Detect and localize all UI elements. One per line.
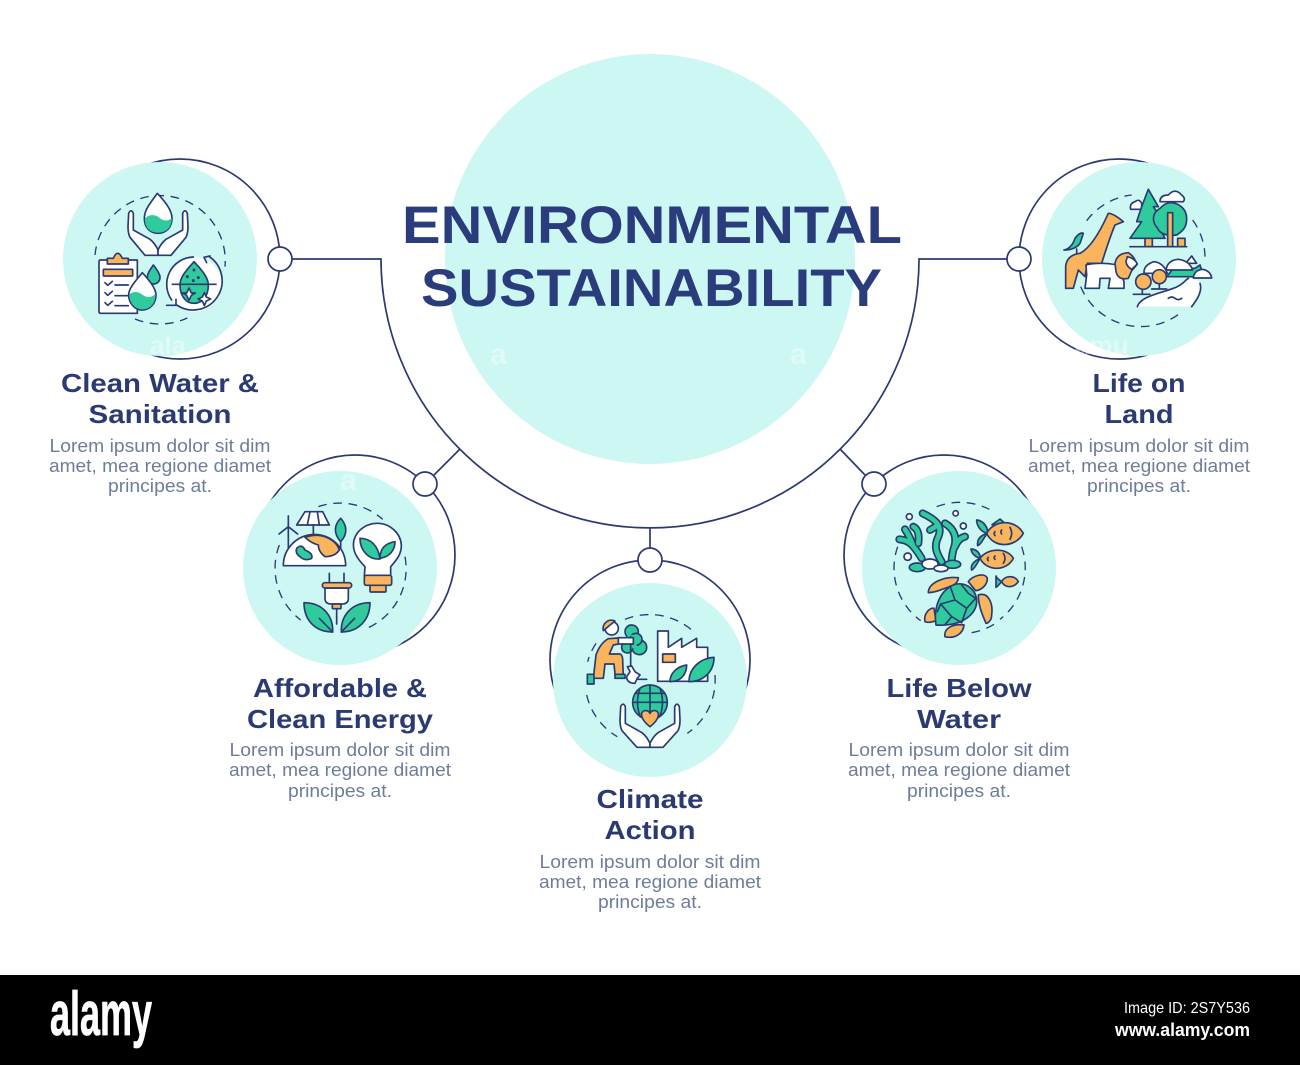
ring: energy bbox=[255, 455, 455, 655]
ring: climate bbox=[550, 560, 750, 760]
heading: water life bbox=[886, 673, 1032, 734]
watermark traces: a bbox=[612, 455, 624, 477]
mint disc: energy bbox=[243, 471, 437, 665]
text: energy description: principes at. bbox=[288, 781, 392, 801]
panel: clean water and sanitation bbox=[49, 159, 292, 496]
text: climate description: amet, mea regione diamet bbox=[539, 872, 761, 892]
logo: alamy: alamy bbox=[50, 980, 152, 1049]
text: water life description: principes at. bbox=[907, 781, 1011, 801]
text: energy description: amet, mea regione diamet bbox=[229, 760, 451, 780]
heading: clean water bbox=[61, 368, 259, 429]
title: SUSTAINABILITY bbox=[421, 259, 882, 318]
connector: big arc with branches bbox=[292, 259, 1007, 548]
text: climate description: Lorem ipsum dolor sit dim bbox=[540, 852, 760, 872]
watermark traces: a bbox=[340, 464, 357, 497]
text: energy description: Lorem ipsum dolor sit dim bbox=[230, 740, 450, 760]
panel: life below water bbox=[844, 455, 1070, 801]
text: land description: principes at. bbox=[1087, 476, 1191, 496]
central mint circle bbox=[445, 54, 855, 464]
text: clean water description: principes at. bbox=[108, 476, 212, 496]
panel: affordable and clean energy bbox=[229, 455, 455, 801]
heading: clean water: Clean Water & bbox=[61, 368, 259, 398]
ring: clean water bbox=[80, 159, 280, 359]
watermark traces bbox=[150, 330, 1128, 497]
text: climate description: principes at. bbox=[598, 892, 702, 912]
text: land description: amet, mea regione diamet bbox=[1028, 456, 1250, 476]
heading: clean water: Sanitation bbox=[88, 399, 232, 429]
heading: energy: Affordable & bbox=[253, 673, 427, 703]
website: www.alamy.com bbox=[1114, 1020, 1250, 1040]
text: clean water description: Lorem ipsum dolor sit dim bbox=[50, 436, 270, 456]
image id: Image ID: 2S7Y536 bbox=[1124, 1000, 1250, 1017]
heading: climate bbox=[596, 784, 704, 845]
icon: solar, bulb, plug and leaves bbox=[275, 503, 406, 632]
node: land bbox=[1007, 247, 1031, 271]
heading: energy bbox=[247, 673, 434, 734]
heading: water life: Life Below bbox=[886, 673, 1032, 703]
text: water life description: amet, mea regione diamet bbox=[848, 760, 1070, 780]
text: clean water description bbox=[49, 436, 271, 496]
heading: climate: Action bbox=[604, 815, 696, 845]
watermark traces: amu bbox=[1075, 330, 1128, 360]
text: land description: Lorem ipsum dolor sit dim bbox=[1028, 436, 1250, 456]
mint disc: land bbox=[1042, 162, 1236, 356]
mint disc: clean water bbox=[63, 162, 257, 356]
text: energy description bbox=[229, 740, 451, 801]
watermark traces: a bbox=[490, 338, 507, 371]
heading: water life: Water bbox=[917, 704, 1001, 734]
heading: energy: Clean Energy bbox=[247, 704, 434, 734]
mint disc: water life bbox=[862, 471, 1056, 665]
node: climate bbox=[638, 548, 662, 572]
node: water life bbox=[862, 472, 886, 496]
icon: giraffe, lion, trees and landscape bbox=[1064, 189, 1212, 327]
ring: land bbox=[1019, 159, 1219, 359]
text: clean water description: amet, mea regione diamet bbox=[49, 456, 271, 476]
node: clean water bbox=[268, 247, 292, 271]
icon: planting figure, factory, globe in hands bbox=[587, 615, 715, 747]
text: water life description: Lorem ipsum dolor sit dim bbox=[848, 740, 1070, 760]
text: land description bbox=[1028, 436, 1250, 496]
watermark traces: ala bbox=[150, 330, 187, 360]
node: energy bbox=[413, 472, 437, 496]
heading: land: Land bbox=[1104, 399, 1174, 429]
icon: hands, drops, checklist and filter bbox=[95, 193, 225, 324]
heading: land bbox=[1092, 368, 1186, 429]
heading: climate: Climate bbox=[596, 784, 704, 814]
mint disc: climate bbox=[553, 583, 747, 777]
panel: climate action bbox=[539, 548, 761, 912]
panel: life on land bbox=[1007, 159, 1250, 496]
watermark traces: a bbox=[790, 338, 807, 371]
text: climate description bbox=[539, 852, 761, 912]
ring: water life bbox=[844, 455, 1044, 655]
stock credit bar bbox=[0, 975, 1300, 1065]
icon: seaweed, fish and turtle bbox=[894, 502, 1025, 637]
text: water life description bbox=[848, 740, 1070, 801]
heading: land: Life on bbox=[1092, 368, 1186, 398]
title bbox=[402, 196, 902, 318]
title: ENVIRONMENTAL bbox=[402, 196, 902, 255]
